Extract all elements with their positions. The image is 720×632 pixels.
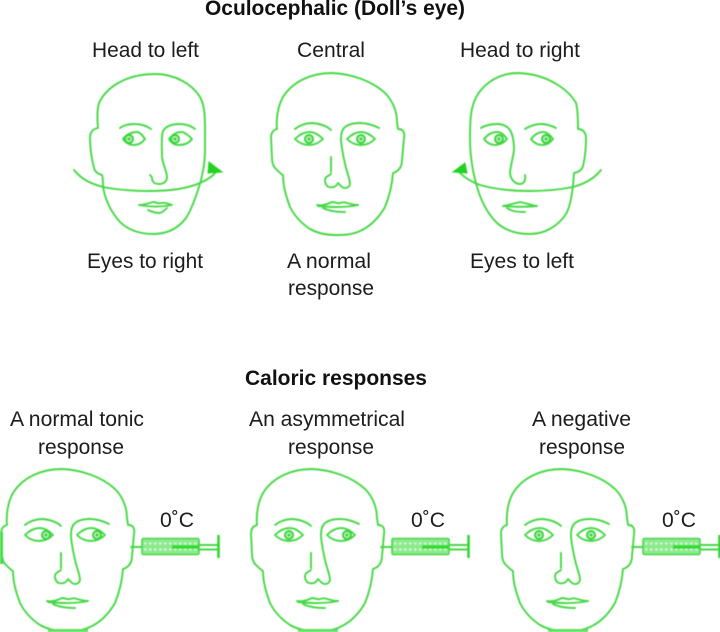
label: central: Central [297, 39, 365, 62]
syringe [632, 535, 720, 558]
heading: caloric responses: Caloric responses [245, 367, 427, 390]
panel: head to left [74, 39, 222, 273]
panel: head to right [453, 39, 601, 273]
label: a negative response: response [539, 436, 625, 459]
label: a normal response: A normal [287, 250, 371, 273]
rotation arrow [74, 162, 222, 191]
face turned to left [74, 74, 222, 234]
face with eyes right [0, 469, 218, 631]
label: eyes to left: Eyes to left [470, 250, 574, 273]
label: a normal tonic response: response [38, 436, 124, 459]
label: temperature: 0˚C [411, 509, 445, 532]
label: eyes to right: Eyes to right [87, 250, 203, 273]
label: head to left: Head to left [92, 39, 199, 62]
face with one eye deviated [251, 469, 468, 631]
label: temperature: 0˚C [662, 509, 696, 532]
label: head to right: Head to right [460, 39, 580, 62]
label: a normal tonic response: A normal tonic [10, 408, 144, 431]
rotation arrow [453, 163, 601, 191]
syringe [381, 535, 468, 558]
panel: normal tonic response [0, 408, 218, 631]
panel: central [271, 39, 404, 300]
face turned to right [453, 73, 601, 234]
label: an asymmetrical response: response [288, 436, 374, 459]
label: temperature: 0˚C [160, 509, 194, 532]
panel: negative response [501, 408, 720, 631]
face with eyes central [501, 469, 720, 631]
face: central [271, 73, 404, 235]
label: a normal response: response [288, 277, 374, 300]
label: an asymmetrical response: An asymmetrical [249, 408, 405, 431]
syringe [131, 535, 218, 558]
panel: asymmetrical response [249, 408, 468, 631]
label: a negative response: A negative [532, 408, 631, 431]
